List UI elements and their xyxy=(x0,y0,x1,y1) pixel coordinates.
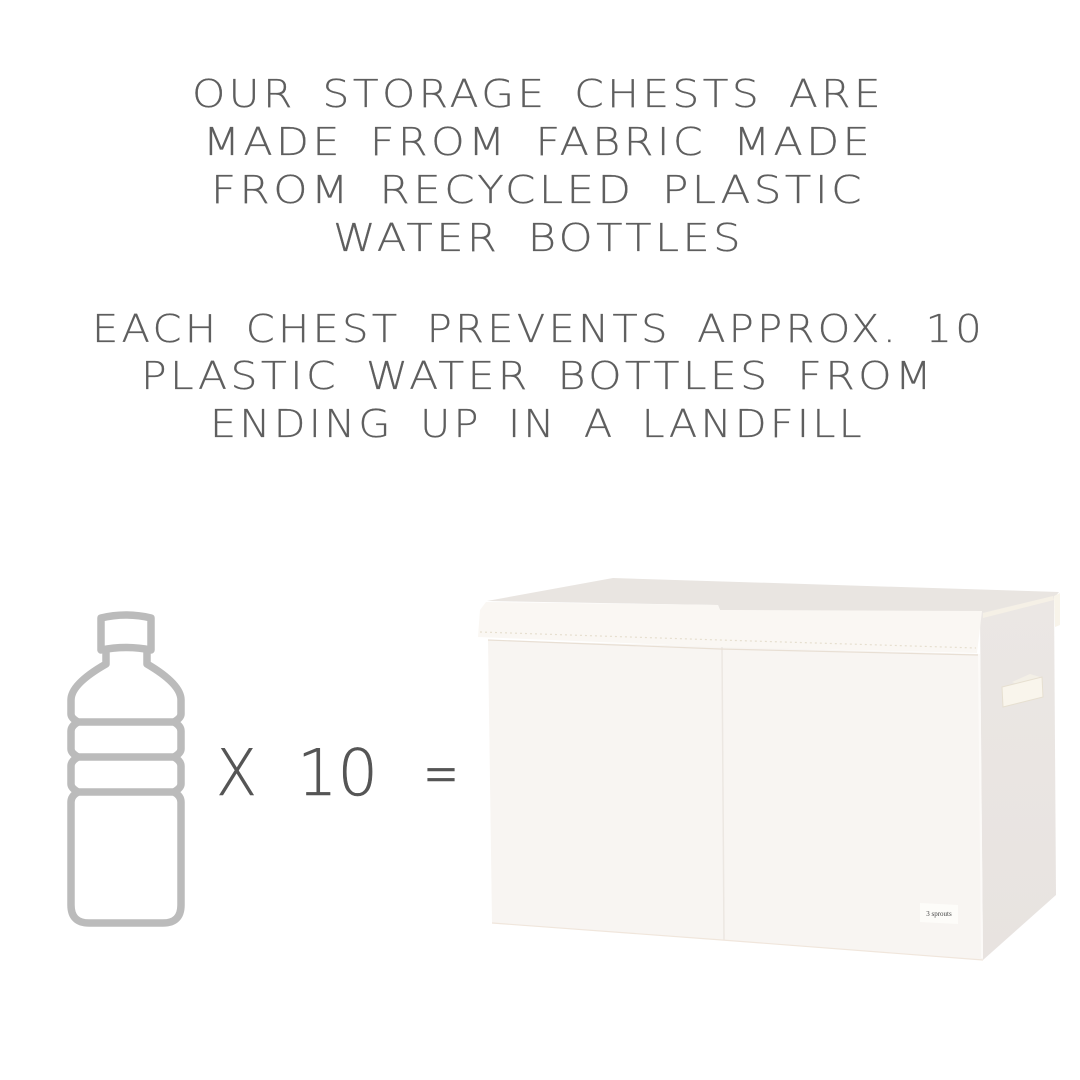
equation: times ten equals xyxy=(216,737,459,811)
heading: recycled fabric statement: WATER BOTTLES xyxy=(333,216,744,260)
icon: plastic water bottle xyxy=(71,615,181,923)
lid front flap xyxy=(478,602,982,653)
chest lid top xyxy=(487,578,1059,613)
front centre seam xyxy=(722,647,724,940)
text block: landfill statement: PLASTIC WATER BOTTLES FROM xyxy=(141,354,935,398)
heading: recycled fabric statement: FROM RECYCLED PLASTIC xyxy=(211,168,865,212)
flap stitching xyxy=(480,632,976,648)
side seam strip xyxy=(983,596,1054,618)
heading: recycled fabric statement xyxy=(192,72,884,260)
photo: cream storage chest xyxy=(478,578,1060,960)
equation: times ten equals: 10 xyxy=(297,737,378,811)
lid corner tab xyxy=(1054,593,1060,627)
text block: landfill statement: EACH CHEST PREVENTS APPROX. 10 xyxy=(92,307,985,351)
heading: recycled fabric statement: MADE FROM FABRIC MADE xyxy=(203,120,873,164)
front right edge xyxy=(979,654,982,958)
equation: times ten equals: = xyxy=(423,737,459,811)
chest front panels xyxy=(488,640,983,960)
brand label xyxy=(920,903,958,924)
handle xyxy=(1002,674,1043,707)
flap shadow xyxy=(488,640,978,655)
text block: landfill statement xyxy=(92,307,985,446)
bottom edge xyxy=(492,923,983,960)
text block: landfill statement: ENDING UP IN A LANDFILL xyxy=(210,402,865,446)
chest side panel xyxy=(980,596,1056,960)
equation: times ten equals: X xyxy=(216,737,257,811)
heading: recycled fabric statement: OUR STORAGE CHESTS ARE xyxy=(192,72,884,116)
brand label: 3 sprouts xyxy=(926,910,952,918)
